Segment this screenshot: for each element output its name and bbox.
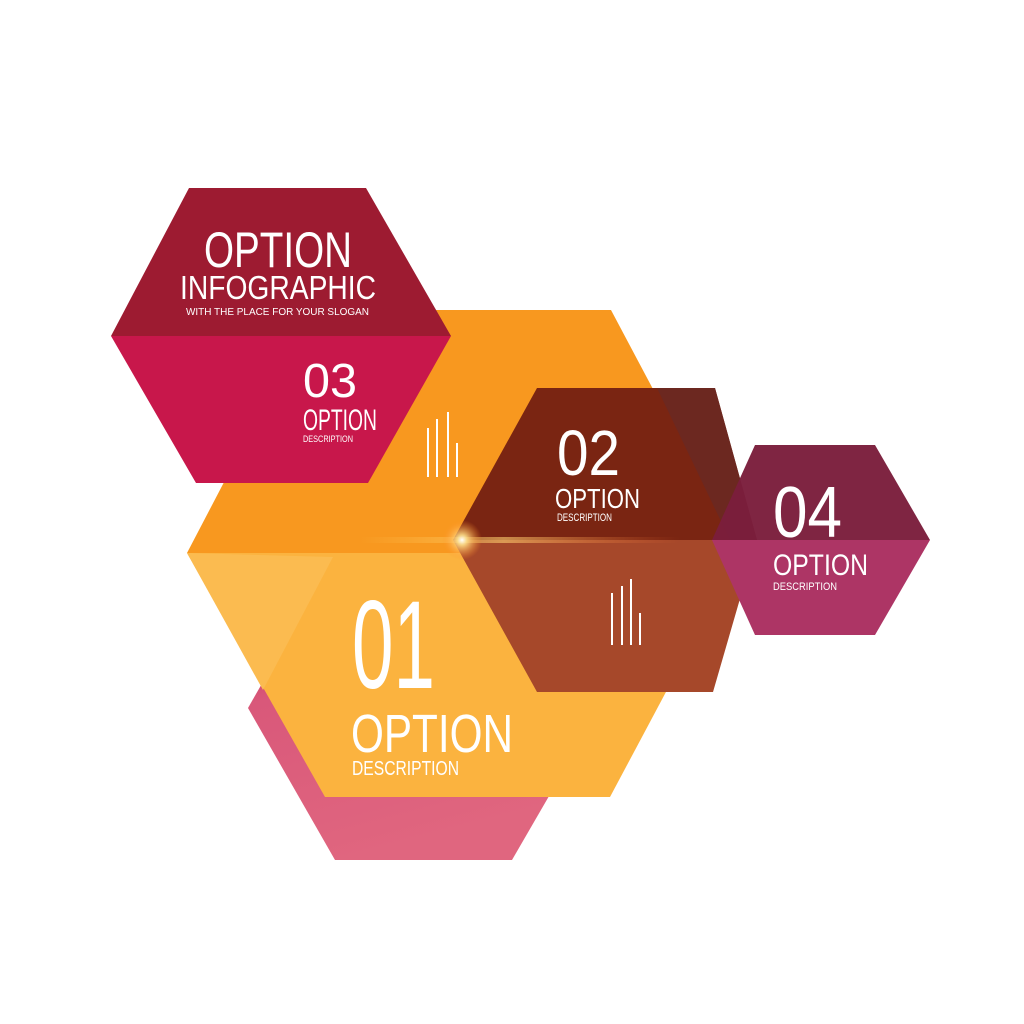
glare bbox=[360, 520, 680, 560]
option 02 text: 02 bbox=[557, 417, 620, 489]
option 03 text: DESCRIPTION bbox=[303, 434, 353, 444]
option 03 text bbox=[303, 355, 377, 444]
option 03 text: OPTION bbox=[303, 404, 377, 437]
option 02 text bbox=[555, 417, 640, 524]
hexagon: crimson 03 title bbox=[111, 188, 451, 483]
title text: OPTION bbox=[204, 222, 352, 278]
option 01 text: 01 bbox=[352, 576, 435, 715]
option 02 text: OPTION bbox=[555, 483, 640, 514]
option 04 text: DESCRIPTION bbox=[773, 581, 837, 593]
hexagon: brown 02 bbox=[453, 388, 757, 692]
hexagon: magenta 04 bbox=[712, 445, 930, 635]
option 01 text: OPTION bbox=[351, 704, 513, 764]
icon: bars 1 bbox=[428, 412, 457, 477]
option 04 text: 04 bbox=[773, 473, 842, 553]
option 04 text bbox=[773, 473, 868, 593]
option 01 text bbox=[351, 576, 513, 780]
option 03 text: 03 bbox=[303, 355, 357, 408]
option 01 text: DESCRIPTION bbox=[352, 758, 459, 780]
icon: bars 2 bbox=[612, 579, 640, 645]
title text: WITH THE PLACE FOR YOUR SLOGAN bbox=[186, 307, 369, 318]
option 02 text: DESCRIPTION bbox=[557, 512, 612, 524]
title text bbox=[180, 222, 376, 318]
title text: INFOGRAPHIC bbox=[180, 269, 376, 306]
hexagon: orange 01 bbox=[187, 310, 740, 797]
hexagon: pink back bbox=[248, 556, 600, 860]
option 04 text: OPTION bbox=[773, 549, 868, 582]
